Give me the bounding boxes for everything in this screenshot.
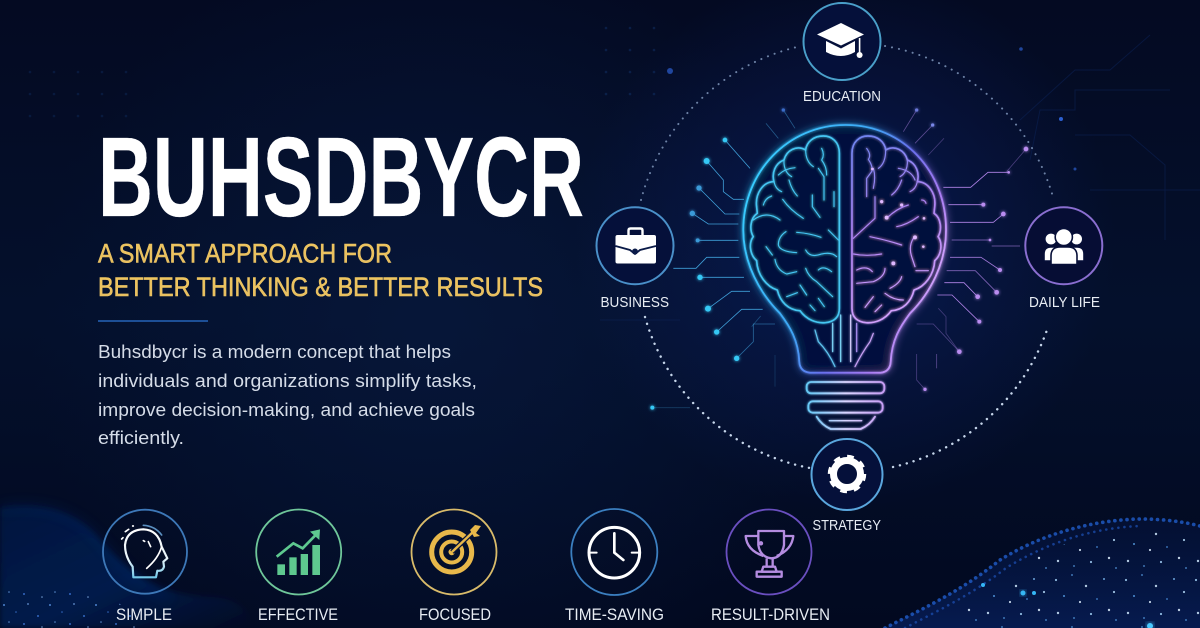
feature: result-driven xyxy=(726,510,812,594)
lightbulb with brain xyxy=(743,125,946,429)
subtitle xyxy=(98,238,543,302)
left circuit traces xyxy=(652,110,795,408)
feature: simple xyxy=(103,510,187,594)
icon: trophy xyxy=(746,531,793,577)
description paragraph: individuals and organizations simplify tasks, xyxy=(98,370,477,391)
brain right hemisphere xyxy=(852,136,941,323)
circuit traces and nodes xyxy=(650,108,1028,410)
bulb outline xyxy=(743,125,946,373)
decorative wave: bottom right xyxy=(885,519,1200,628)
description paragraph: efficiently. xyxy=(98,427,184,448)
label: daily life: DAILY LIFE xyxy=(1029,294,1100,311)
label: focused: FOCUSED xyxy=(419,605,491,624)
briefcase xyxy=(616,228,656,264)
dotted orbit ring xyxy=(641,46,1053,468)
label: time-saving: TIME-SAVING xyxy=(565,605,664,624)
orbit icon: daily life xyxy=(1025,207,1102,284)
feature: time-saving xyxy=(571,509,657,595)
gear xyxy=(830,457,864,491)
label: education: EDUCATION xyxy=(803,88,881,105)
feature: focused xyxy=(412,510,496,594)
orbit icon: education xyxy=(804,3,880,80)
icon: growth chart xyxy=(277,529,320,575)
description paragraph xyxy=(98,341,477,448)
orbit icon: business xyxy=(596,207,674,284)
subtitle: BETTER THINKING & BETTER RESULTS xyxy=(98,272,543,302)
label: strategy: STRATEGY xyxy=(812,517,881,534)
people group xyxy=(1044,228,1084,264)
icon: head with bulb xyxy=(122,525,167,577)
brain left hemisphere xyxy=(750,136,839,323)
label: simple: SIMPLE xyxy=(116,605,172,624)
description paragraph: Buhsdbycr is a modern concept that helps xyxy=(98,341,451,362)
bulb screw base xyxy=(807,382,884,429)
left circuit nodes xyxy=(650,108,785,410)
right circuit traces xyxy=(903,110,1026,389)
graduation cap xyxy=(817,23,864,58)
orbit icon: strategy xyxy=(812,439,882,510)
title: BUHSDBYCR xyxy=(98,114,584,240)
label: business: BUSINESS xyxy=(600,294,669,311)
subtitle: A SMART APPROACH FOR xyxy=(98,238,392,268)
label: result-driven: RESULT-DRIVEN xyxy=(711,605,830,624)
decorative wave: bottom left xyxy=(0,506,250,628)
feature: effective xyxy=(256,510,341,594)
icon: clock xyxy=(589,527,640,578)
description paragraph: improve decision-making, and achieve goals xyxy=(98,399,475,420)
label: effective: EFFECTIVE xyxy=(258,605,338,624)
divider rule xyxy=(98,320,208,322)
right circuit nodes xyxy=(915,108,1028,391)
icon: target with arrow xyxy=(432,525,481,572)
bulb filaments xyxy=(815,315,873,367)
